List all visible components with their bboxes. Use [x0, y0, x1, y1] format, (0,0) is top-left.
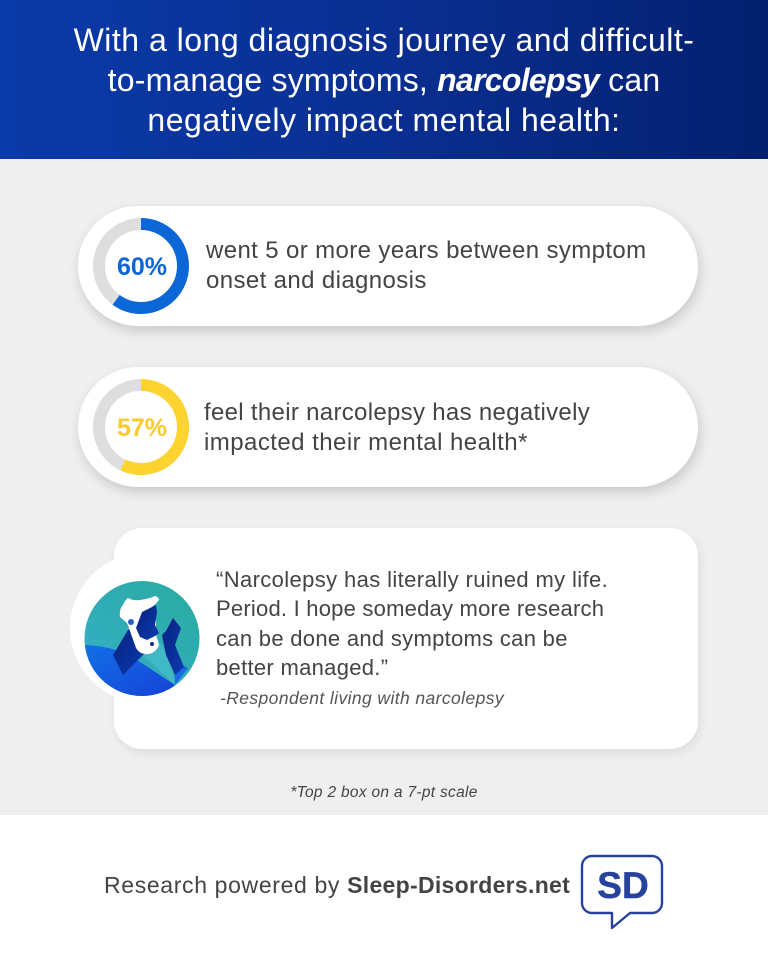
quote text: “Narcolepsy has literally ruined my life. — [216, 567, 608, 592]
stat text: onset and diagnosis — [206, 267, 427, 294]
grey content panel — [0, 159, 768, 815]
donut chart 57%: 57% — [117, 414, 167, 442]
title: to-manage symptoms, narcolepsy can — [108, 62, 660, 98]
title — [74, 22, 694, 138]
stat text: feel their narcolepsy has negatively — [204, 399, 590, 426]
attribution: -Respondent living with narcolepsy — [220, 688, 504, 708]
header banner — [0, 0, 768, 159]
stat text — [206, 237, 647, 294]
logo: SD speech bubble: SD — [597, 865, 649, 906]
quote text: better managed.” — [216, 655, 388, 680]
logo: SD speech bubble — [580, 854, 664, 930]
icon: person with hand to face — [84, 581, 200, 696]
quote text: Period. I hope someday more research — [216, 596, 604, 621]
donut chart 60%: 60% — [117, 253, 167, 281]
title: negatively impact mental health: — [147, 102, 621, 138]
footnote: *Top 2 box on a 7-pt scale — [290, 784, 478, 801]
stat text: impacted their mental health* — [204, 429, 528, 456]
donut chart 57% — [93, 379, 189, 475]
footer credit: Research powered by Sleep-Disorders.net — [104, 872, 570, 898]
stat text — [204, 399, 590, 456]
title: With a long diagnosis journey and difficult- — [74, 22, 694, 58]
avatar backing circle — [70, 553, 220, 703]
card body — [114, 528, 698, 749]
stat card: 60% — [78, 206, 698, 326]
stat text: went 5 or more years between symptom — [206, 237, 647, 264]
quote text: can be done and symptoms can be — [216, 626, 568, 651]
donut chart 60% — [93, 218, 189, 314]
quote text — [216, 567, 608, 708]
quote card — [70, 528, 700, 754]
stat card: 57% — [78, 367, 698, 487]
